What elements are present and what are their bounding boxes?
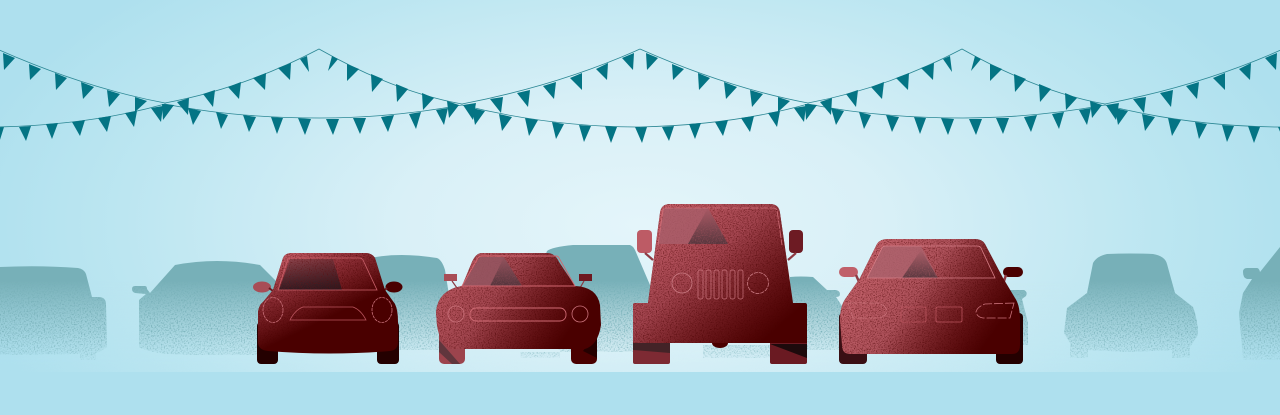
grille [470, 308, 566, 321]
bunting strings with pennants [0, 49, 1280, 143]
red car 4: sedan [839, 239, 1023, 364]
windshield outline [278, 258, 377, 290]
ghost car: behind first red car [370, 255, 449, 350]
mirrors [637, 230, 803, 260]
ghost car: beetle [1064, 254, 1198, 358]
grille [290, 307, 366, 320]
windshield outline [867, 246, 995, 278]
red car 2: sports car [436, 253, 601, 364]
headlights [448, 306, 588, 322]
headlamps [263, 298, 392, 322]
headlights [848, 303, 1014, 318]
ground strip [0, 372, 1280, 415]
windshield tint [658, 208, 728, 244]
windshield outline [658, 208, 782, 245]
windshield shade [688, 208, 728, 244]
windshield outline [462, 256, 575, 286]
body base [633, 204, 807, 343]
ghost car: behind jeep and sedan [703, 276, 845, 358]
windshield tint [462, 257, 522, 286]
mirrors [444, 274, 592, 288]
mirrors [253, 282, 402, 294]
ghost car: far right [1239, 247, 1280, 360]
windshield shade [279, 259, 342, 290]
windshield shade [902, 250, 938, 278]
grille [901, 307, 962, 322]
body highlight [633, 204, 807, 343]
tow hitch [712, 338, 728, 348]
tyres [839, 313, 1023, 364]
grainy haze over lower part of background cars [0, 286, 1280, 360]
grille slots [698, 270, 743, 299]
tyres [439, 325, 597, 364]
ghost car: behind second red car [520, 245, 650, 358]
mirrors [839, 267, 1023, 284]
ghost car: far left [0, 266, 107, 360]
red car 3: jeep [633, 204, 807, 364]
ghost car: behind sedan right [1010, 290, 1028, 345]
background car silhouettes [0, 245, 1280, 360]
body highlight [436, 253, 601, 349]
body base [436, 253, 601, 349]
headlights [672, 272, 768, 294]
body base [840, 239, 1020, 354]
windshield tint [867, 246, 938, 278]
ghost car: second from left [132, 261, 277, 355]
tyres [633, 335, 807, 364]
body highlight [258, 253, 398, 354]
body highlight [840, 239, 1020, 354]
tyres [257, 322, 399, 364]
windshield shade [490, 257, 522, 286]
body base [258, 253, 398, 354]
red car 1: mini [253, 253, 402, 364]
